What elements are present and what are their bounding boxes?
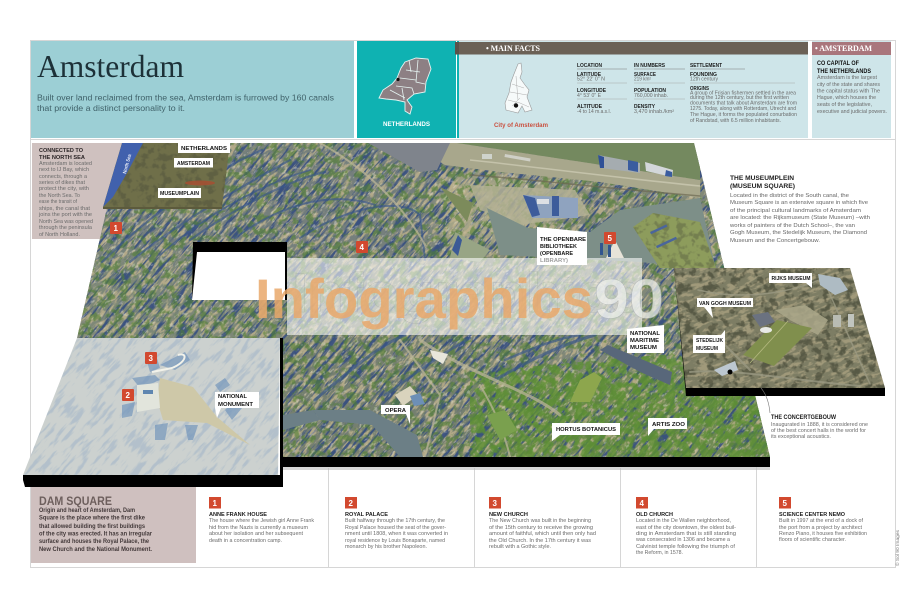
label: Artis Zoo: ARTIS ZOO [652,422,686,428]
text: the Museumplein: THE MUSEUMPLEIN [730,175,795,182]
text: the Concertgebouw [771,415,868,440]
park [743,320,812,366]
label: Openbare Bibliotheek: THE OPENBARE [540,237,586,243]
column: Science Center Nemo: the port from a project by architect [779,525,863,531]
east island [633,213,716,268]
column: location: LATITUDE [577,72,601,78]
body text: Amsterdam is the largest [817,75,878,81]
header bar: • MAIN FACTS [486,44,541,53]
column: Royal Palace: Built halfway through the 17th century, the [345,518,445,524]
text: the Museumplein: Gogh Museum, the Stedelijk Museum, the Diamond [730,230,867,236]
column: Science Center Nemo [779,497,867,543]
block: Dam Square [20,335,285,487]
heading: THE NORTH SEA [39,155,86,161]
body text: through the peninsula [39,225,92,231]
label: National Monument: MONUMENT [218,402,254,408]
body text: next to IJ Bay, which [39,167,89,173]
label: NETHERLANDS [383,122,430,128]
icon: map of the Netherlands [379,58,431,114]
column: settlement: documents that talk about Amsterdam are from [690,100,797,106]
text: the Concertgebouw: its exceptional acoustics. [771,434,831,440]
plaza [157,378,250,445]
column: settlement: FOUNDING [690,72,717,78]
label: National Maritime Museum: NATIONAL [630,331,661,337]
text: the Concertgebouw: THE CONCERTGEBOUW [771,415,836,421]
body text: ease the transit of [39,199,78,205]
cutout: white empty block [192,242,287,300]
label: Amsterdam: AMSTERDAM [177,161,210,167]
building: Concertgebouw [714,361,738,376]
marker 2 [122,389,134,401]
column: Royal Palace: monarch by his brother Napoleon. [345,544,427,550]
column: settlement: The Hague, it forms the populated conurbation [690,112,797,118]
panel: Dam Square [31,487,196,563]
body text: Origin and heart of Amsterdam, Dam [39,507,135,514]
column: Science Center Nemo: SCIENCE CENTER NEMO [779,512,845,518]
column: Royal Palace: ROYAL PALACE [345,512,388,518]
column: New Church: the Old Church. In the 17th century it was [489,538,592,544]
body text: executive and judicial powers. [817,109,887,115]
credit: © Sol 90 Images [894,529,900,566]
marker 4: 4 [360,243,364,252]
white roof [430,350,448,364]
column: in numbers: POPULATION [634,88,666,94]
body text: connects, through a [39,174,87,180]
marker 2: 2 [126,391,130,400]
column: location: 52° 22' 0" N [577,76,605,82]
marker 5 [604,232,616,244]
railway embankment [440,143,700,198]
label: Stedelijk Museum: STEDELIJK [696,338,723,344]
label: Hortus Botanicus: HORTUS BOTANICUS [556,427,616,433]
column: in numbers: SURFACE [634,72,656,78]
marker 4 [356,241,368,253]
body text: that allowed building the first buildings [39,523,146,530]
label: National Maritime Museum [627,325,664,353]
label: City of Amsterdam: City of Amsterdam [494,122,548,129]
column: Anne Frank House: The house where the Jewish girl Anne Frank [209,518,315,524]
label: Stedelijk Museum [693,330,725,353]
label: Openbare Bibliotheek: BIBLIOTHEEK [540,244,577,250]
column: Anne Frank House [209,497,315,544]
marker: Concertgebouw dot [728,370,732,374]
building: Rijksmuseum [818,274,848,295]
column: Old Church [636,497,736,556]
label: Van Gogh Museum [697,298,753,318]
green wedge [440,187,473,222]
watermark: 90 [594,267,664,330]
marker 3 [145,352,157,364]
text: the Museumplein: Museum and the Concertgebouw. [730,238,820,244]
light quay area [470,185,590,225]
column: Old Church: Located in the De Wallen neighborhood, [636,518,731,524]
watermark [255,258,664,335]
panel: title header [31,41,354,138]
column: Royal Palace: Royal Palace housed the seat of the gover- [345,525,446,531]
column: in numbers: DENSITY [634,104,655,110]
block: Museumplein aerial [670,265,890,396]
body text: the capital status with The [817,88,880,94]
column: Science Center Nemo: Renzo Piano, it houses five exhibition [779,531,867,537]
label: National Maritime Museum: MUSEUM [630,345,657,351]
map of North Holland [505,63,532,113]
body text: New Church and the National Monument. [39,546,152,553]
column: New Church [489,497,596,550]
column: location: LONGITUDE [577,88,606,94]
column: Anne Frank House: about her isolation and her subsequent [209,531,304,537]
column: settlement: 1275. Today, along with Rotterdam, Utrecht and [690,106,796,112]
label: Openbare Bibliotheek: LIBRARY) [540,258,568,264]
column: location: ALTITUDE [577,104,602,110]
header bar: • AMSTERDAM [815,44,872,53]
column: New Church: The New Church was built in the beginning [489,518,591,524]
inset: North Sea map [100,143,235,209]
column: settlement: 12th century [690,76,718,82]
shadows [122,352,242,440]
column: location: -4 to 14 m.a.s.l. [577,109,611,115]
canal rings [102,150,595,400]
label: Museumplain: MUSEUMPLAIN [160,191,199,197]
column: in numbers: 219 km² [634,76,651,82]
Royal Palace [137,383,160,412]
body text [38,161,93,238]
harbour water [487,198,716,270]
label: National Monument [215,392,259,418]
texture: street blocks [70,140,780,465]
body text: series of dikes that [39,180,86,186]
panel: connected to the North Sea [32,143,122,239]
body text: Square is the place where the first dike [39,514,146,522]
body text: North Sea was opened [39,219,93,225]
header bar [455,42,808,54]
column: location: LOCATION [577,63,602,69]
marker 1: 1 [114,224,118,233]
heading: CONNECTED TO [39,148,83,154]
label: Openbare Bibliotheek [537,227,587,265]
column: Royal Palace: royal residence by Louis Bonaparte, named [345,538,445,544]
streets [320,143,560,457]
label: Opera [381,405,410,424]
column: settlement: ORIGINS [690,86,709,92]
body text: Amsterdam is located [39,161,92,167]
column: Science Center Nemo: 5 [782,499,788,508]
column: Old Church: Calvinist temple following the triumph of [636,544,736,550]
buildings east [833,315,841,327]
body text: the North Sea. To [39,193,80,199]
column: in numbers: 3,470 inhab./km² [634,109,674,115]
roads [690,275,870,386]
label: Artis Zoo [648,418,687,436]
aerial photo: central Amsterdam [70,140,780,465]
column: Old Church: east of the city downtown, the oldest buil- [636,525,736,531]
marker 1 [110,222,122,234]
body text [817,75,887,115]
column: Anne Frank House: 1 [212,499,218,508]
column: Anne Frank House: ANNE FRANK HOUSE [209,512,267,518]
opera roof [395,386,418,406]
leader line: Concertgebouw [761,388,770,413]
title: Amsterdam [37,49,184,84]
column: Old Church: 4 [640,499,644,508]
heading: THE NETHERLANDS [817,68,871,75]
label: Rijks Museum [769,273,812,288]
column: New Church: rebuilt with a Gothic style. [489,544,551,550]
panel: main facts [455,41,808,138]
intro text: that provide a distinct personality to it. [37,103,185,113]
text: the Museumplein: Located in the district of the South canal, the [730,193,849,199]
watermark: Infographics [292,261,642,324]
label: Opera: OPERA [385,408,406,414]
column: New Church: amount of faithful, which until then only had [489,531,596,537]
IJ water front [457,143,700,180]
column: Old Church: ding in Amsterdam that is still standing [636,531,736,537]
body text: ships, the canal that [39,206,91,212]
label: Openbare Bibliotheek: (OPENBARE [540,251,573,257]
text: the Museumplein: Museum Square is an extensive square in which five [730,200,868,206]
text: the Concertgebouw: Inaugurated in 1888, it is considered one [771,422,868,428]
body text: city of the state and shares [817,82,881,88]
body text: Hague, which houses the [817,95,876,101]
marker 3: 3 [148,354,154,363]
label: National Maritime Museum: MARITIME [630,338,659,344]
column: New Church: NEW CHURCH [489,512,528,518]
text: the Concertgebouw: of the best concert halls in the world for [771,428,866,434]
column: Old Church: the Reform, in 1578. [636,550,683,556]
body text: of the city was erected. It has an irregular [39,530,153,538]
column: Royal Palace [345,497,448,550]
column: Anne Frank House: death in a concentration camp. [209,538,282,544]
marker 5: 5 [608,234,612,243]
column: Old Church: was consecrated in 1306 and became a [636,537,730,543]
column: Old Church: OLD CHURCH [636,512,673,518]
text: the Museumplein: are located: the Rijksmuseum (State Museum) –with [730,215,870,221]
intro text [37,92,334,113]
tan plaza [775,305,828,335]
label: Hortus Botanicus [552,423,620,441]
building: top right warehouse [598,155,673,177]
label: National Monument: NATIONAL [218,394,248,400]
column: location [577,63,627,115]
label: North Sea: North Sea [122,153,133,175]
panel: Amsterdam capital [812,41,891,138]
body text: surface and houses the Royal Palace, the [39,538,150,545]
column: in numbers: 760,000 inhab. [634,93,668,99]
heading: CO CAPITAL OF [817,60,859,67]
body text: of North Holland. [39,232,80,238]
panel: Netherlands locator [357,41,456,138]
building: library blocks [523,195,578,218]
heading [817,60,871,75]
column: settlement: during the 12th century, but the first written [690,95,789,101]
building: Van Gogh [760,327,772,333]
column: Royal Palace: 2 [348,499,354,508]
watermark: Infographics [255,267,593,330]
docks [450,232,490,262]
column: Anne Frank House: hid from the Nazis is currently a museum [209,525,308,531]
body text [39,507,153,553]
body text: protect the city, with [39,186,89,192]
column: New Church: of the 15th century to receive the growing [489,525,593,531]
column: in numbers: IN NUMBERS [634,63,665,69]
text: the Museumplein: works of painters of the Dutch School–, the van [729,223,855,229]
intro text: Built over land reclaimed from the sea, Amsterdam is furrowed by 160 canals [37,92,334,102]
text: the Museumplein: of the principal cultural landmarks of Amsterdam [730,208,861,214]
text: the Museumplein [729,175,870,244]
column: Royal Palace: nment until 1808, when it was converted in [345,531,448,537]
main aerial block base [283,457,770,470]
column: Science Center Nemo: Built in 1997 at the end of a dock of [779,518,864,524]
south canal water [313,410,423,457]
column: in numbers [634,63,685,115]
text: the Museumplein: (MUSEUM SQUARE) [730,183,795,190]
label: Netherlands: NETHERLANDS [181,146,227,152]
column: settlement: A group of Frisian fishermen settled in the area [690,90,796,96]
column: settlement [690,63,797,124]
body text: joins the port with the [38,212,92,218]
heading: DAM SQUARE [39,494,112,508]
body text: seats of the legislative, [817,102,872,108]
building: NEMO pier [606,242,624,258]
column: location: 4° 53' 0" E [577,93,602,99]
heading [39,148,86,161]
column: Science Center Nemo: floors of scientific character. [779,537,846,543]
central station [368,143,450,172]
column: settlement: of Randstad, with 6.5 million inhabitants. [690,118,781,124]
label: Stedelijk Museum: MUSEUM [696,346,718,352]
parks [570,372,602,402]
label: Rijks Museum: RIJKS MUSEUM [772,276,811,282]
New Church [152,354,185,372]
column: settlement: SETTLEMENT [690,63,723,69]
label: Van Gogh Museum: VAN GOGH MUSEUM [699,301,751,307]
column: New Church: 3 [492,499,498,508]
